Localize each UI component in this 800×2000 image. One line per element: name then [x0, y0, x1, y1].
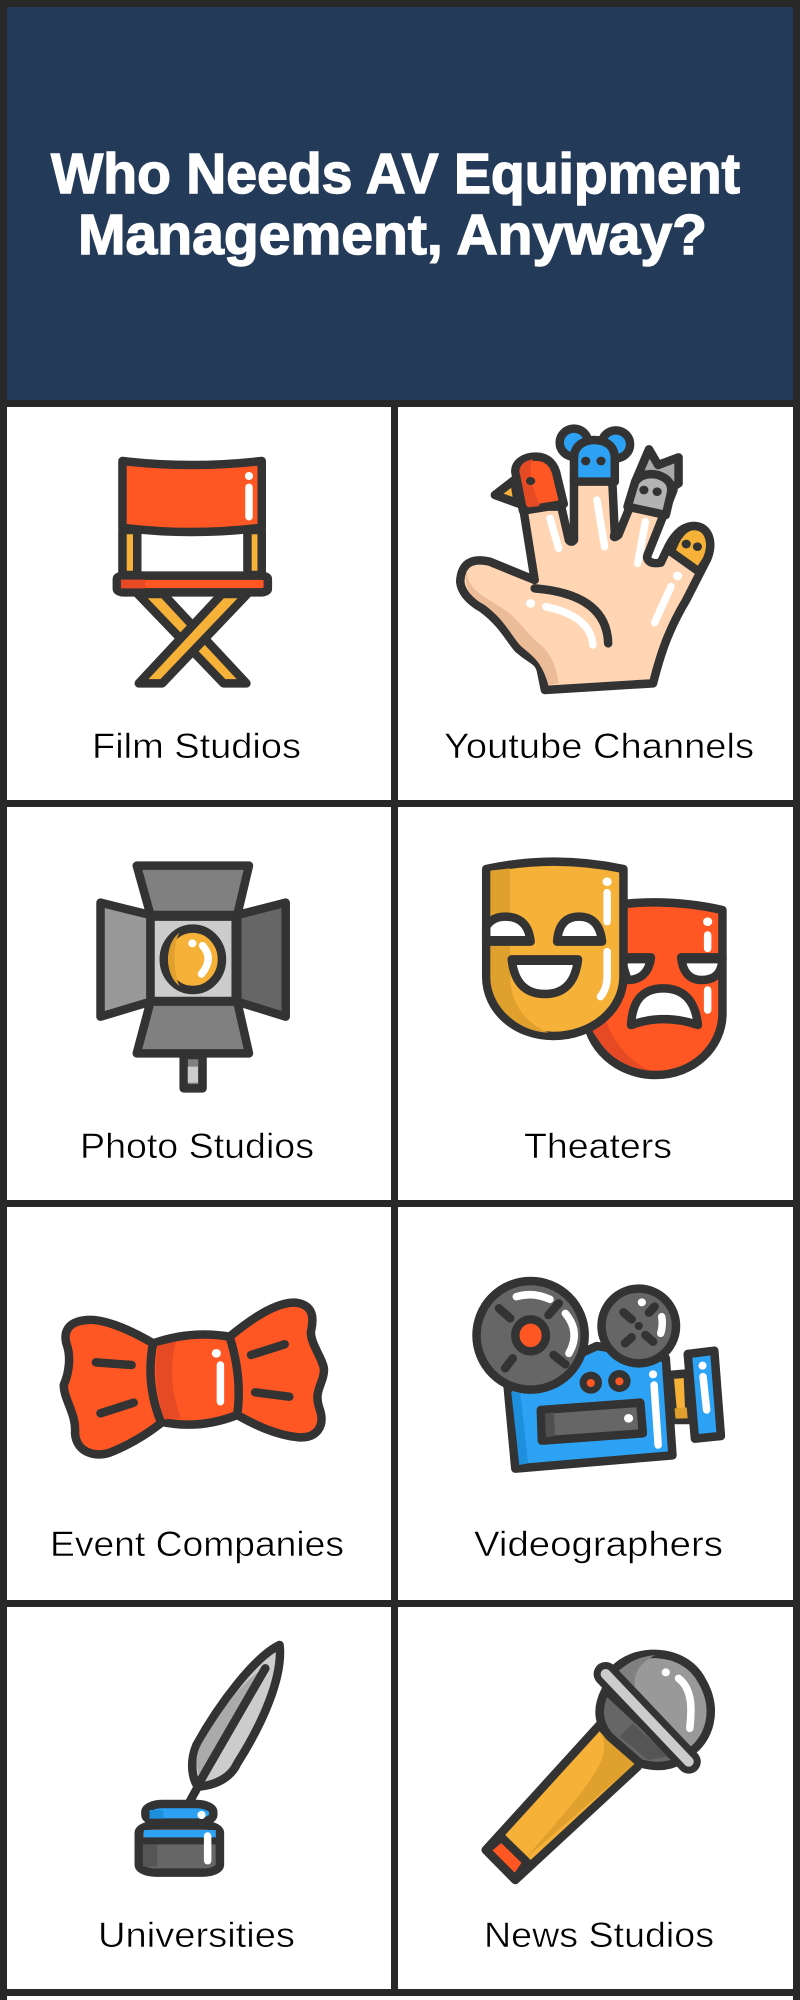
icon: happy yellow mask: [486, 862, 623, 1036]
panel: event companies: [7, 1207, 391, 1600]
icon: quill and ink: [139, 1645, 280, 1873]
icon: studio light: [101, 866, 286, 1088]
panel: photo studios: [7, 807, 391, 1200]
title: Management, Anyway?: [78, 203, 707, 267]
panel: film studios: [7, 407, 391, 800]
icon: theater masks: [486, 862, 722, 1075]
label: Theaters: [524, 1127, 672, 1166]
label: Event Companies: [50, 1525, 344, 1564]
title: [51, 142, 740, 267]
label: Film Studios: [92, 727, 301, 766]
icon: finger puppets hand: [460, 429, 710, 690]
icon: film camera: [477, 1281, 721, 1469]
label: Photo Studios: [80, 1127, 314, 1166]
title: Who Needs AV Equipment: [51, 142, 740, 206]
panel: videographers: [398, 1207, 793, 1600]
icon: director chair: [117, 461, 268, 683]
panel: news studios: [398, 1607, 793, 1989]
panel: universities: [7, 1607, 391, 1989]
panel: youtube channels: [398, 407, 793, 800]
icon: microphone: [486, 1654, 711, 1880]
label: Videographers: [474, 1525, 723, 1564]
icon: bow tie: [64, 1303, 324, 1454]
header panel: [7, 7, 793, 400]
panel: theaters: [398, 807, 793, 1200]
label: Youtube Channels: [444, 727, 754, 766]
icon: sad red mask: [587, 902, 722, 1075]
label: Universities: [98, 1916, 295, 1955]
label: News Studios: [484, 1916, 714, 1955]
